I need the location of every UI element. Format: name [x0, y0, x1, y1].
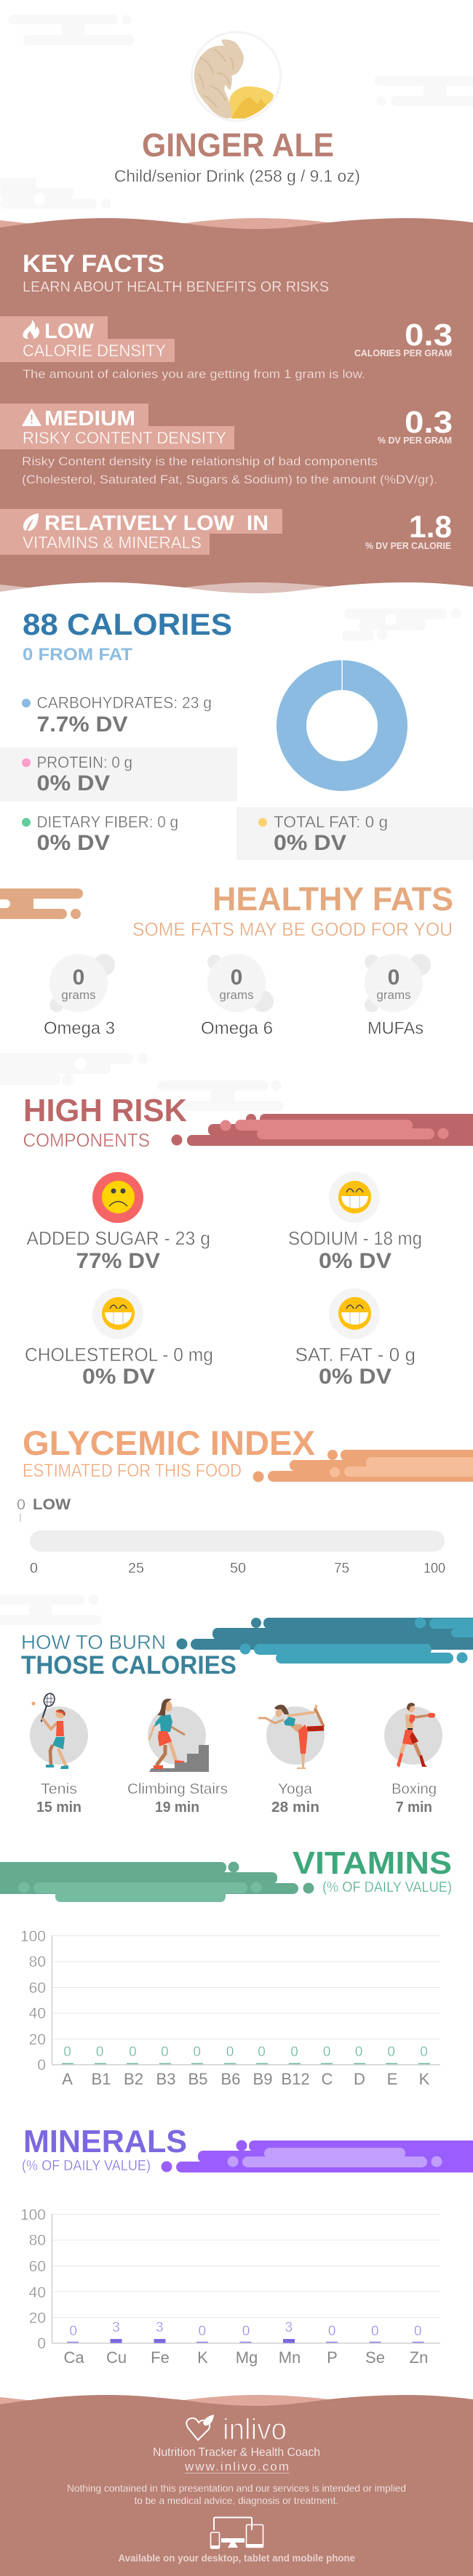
icon: tennis player — [32, 1692, 68, 1769]
fact: medium risky content density: Risky Content density is the relationship of bad components — [22, 454, 378, 468]
risk: saturated fat — [295, 1288, 416, 1389]
bar chart: vitamins — [20, 1928, 440, 2088]
icon: yoga pose — [258, 1705, 324, 1769]
panel: minerals — [20, 2124, 473, 2367]
stat: omega 3: Omega 3 — [44, 1019, 115, 1038]
bar chart: vitamins: 20 — [29, 2031, 46, 2048]
bar chart: vitamins: 0 — [96, 2045, 103, 2060]
bar chart: minerals: 0 — [69, 2324, 77, 2339]
gauge scale: 75 — [334, 1561, 349, 1576]
panel: high risk components — [23, 1093, 473, 1389]
bar chart: vitamins: 0 — [290, 2045, 298, 2060]
stat: omega 6: 0 — [231, 966, 242, 990]
minerals subheading: (% OF DAILY VALUE) — [22, 2158, 151, 2174]
risk: sodium: SODIUM - 18 mg — [288, 1227, 422, 1249]
macro: dietary fiber: 0% DV — [36, 831, 110, 855]
glycemic subheading: ESTIMATED FOR THIS FOOD — [23, 1461, 242, 1481]
gauge marker — [17, 1496, 71, 1522]
icon: leaf — [23, 513, 39, 531]
logo: inlivo: inlivo — [223, 2412, 287, 2446]
stat: mufas: 0 — [388, 966, 400, 990]
macro: carbohydrates: CARBOHYDRATES: 23 g — [36, 694, 212, 712]
glycemic heading: GLYCEMIC INDEX — [23, 1424, 315, 1462]
bar chart: vitamins: B1 — [92, 2070, 111, 2088]
bar chart: vitamins: B2 — [124, 2070, 143, 2088]
bar chart: vitamins: A — [62, 2070, 73, 2088]
decorative bars — [0, 1861, 314, 1902]
risk: added sugar: 77% DV — [76, 1249, 160, 1273]
bar chart: vitamins: 0 — [258, 2045, 266, 2060]
bar chart: vitamins: 0 — [193, 2045, 201, 2060]
bar chart: vitamins: 60 — [29, 1980, 46, 1997]
stat: mufas: MUFAs — [367, 1019, 424, 1038]
bar chart: minerals: 40 — [29, 2284, 46, 2301]
bar chart: vitamins: B9 — [253, 2070, 272, 2088]
decorative bars — [172, 1114, 473, 1146]
activity: yoga: 28 min — [271, 1799, 319, 1815]
gauge scale: 0 — [30, 1561, 38, 1576]
gauge track — [30, 1530, 445, 1552]
activity: tennis — [30, 1692, 88, 1815]
activity: boxing — [384, 1703, 442, 1815]
macro: protein: PROTEIN: 0 g — [36, 753, 132, 771]
bar chart: minerals: Ca — [63, 2348, 84, 2367]
icon: flame — [23, 320, 39, 339]
activity: boxing: Boxing — [391, 1781, 437, 1797]
activity: climbing stairs: Climbing Stairs — [127, 1781, 228, 1797]
fact: medium risky content density: (Cholesterol, Saturated Fat, Sugars & Sodium) to the amount (%DV/gr). — [22, 473, 437, 486]
bar chart: minerals: 0 — [414, 2324, 421, 2339]
bar chart: vitamins: K — [419, 2070, 430, 2088]
calories heading: 88 CALORIES — [23, 607, 232, 641]
bar chart: vitamins: 0 — [355, 2045, 362, 2060]
macro: protein: 0% DV — [36, 771, 110, 795]
wave top — [0, 218, 329, 240]
bar chart: minerals: P — [327, 2348, 338, 2367]
macro: total fat: 0% DV — [274, 831, 346, 855]
background cloud: calories — [342, 609, 461, 641]
serving subtitle: Child/senior Drink (258 g / 9.1 oz) — [114, 166, 360, 185]
panel: how to burn those calories — [21, 1617, 473, 1815]
activity: tennis: 15 min — [36, 1799, 82, 1815]
healthy fats heading: HEALTHY FATS — [212, 880, 453, 918]
fact: medium risky content density — [0, 404, 453, 486]
fact: relatively low in vitamins and minerals — [0, 509, 452, 555]
bar chart: minerals: 0 — [37, 2335, 46, 2352]
bar chart: minerals: 0 — [199, 2324, 206, 2339]
panel: calories — [0, 607, 473, 860]
logo: inlivo — [186, 2412, 287, 2446]
fact: medium risky content density: 0.3 — [405, 405, 453, 440]
stat: omega 3: 0 — [73, 966, 84, 990]
disclaimer — [67, 2482, 406, 2506]
risk: cholesterol: 0% DV — [82, 1365, 155, 1389]
tagline: Nutrition Tracker & Health Coach — [153, 2445, 320, 2459]
activity: boxing: 7 min — [396, 1799, 432, 1815]
macro: carbohydrates — [22, 694, 212, 737]
bar chart: vitamins: 40 — [29, 2005, 46, 2022]
disclaimer: Nothing contained in this presentation and our services is intended or implied — [67, 2482, 406, 2494]
bar chart: vitamins: 0 — [63, 2045, 71, 2060]
calories from fat: 0 FROM FAT — [23, 645, 132, 665]
panel: vitamins — [0, 1845, 452, 2088]
panel: footer — [0, 2395, 473, 2576]
panel: glycemic index — [17, 1424, 473, 1576]
icon: grinning face — [102, 1297, 135, 1330]
fact: low calorie density: The amount of calories you are getting from 1 gram is low. — [23, 367, 365, 381]
bar chart: vitamins: 0 — [161, 2045, 169, 2060]
decorative bars — [253, 1450, 473, 1482]
bar chart: minerals: Cu — [106, 2348, 127, 2367]
bar chart: vitamins: 0 — [323, 2045, 330, 2060]
vitamins heading: VITAMINS — [293, 1845, 452, 1881]
title: GINGER ALE — [142, 127, 334, 164]
bar chart: vitamins: 0 — [37, 2057, 46, 2074]
bar chart: vitamins: B6 — [221, 2070, 240, 2088]
bar chart: minerals: 80 — [29, 2232, 46, 2249]
gauge scale: 25 — [128, 1561, 144, 1576]
activity: climbing stairs: 19 min — [155, 1799, 199, 1815]
fact: medium risky content density: RISKY CONTENT DENSITY — [23, 428, 226, 447]
bar chart: vitamins: B12 — [281, 2070, 310, 2088]
gauge scale — [30, 1561, 445, 1576]
risk: sodium: 0% DV — [319, 1249, 391, 1273]
bar chart: minerals: 3 — [112, 2320, 120, 2335]
fact: low calorie density: 0.3 — [405, 318, 453, 353]
decorative bars — [162, 2140, 473, 2172]
macro: carbohydrates: 7.7% DV — [36, 713, 128, 737]
activity: climbing stairs — [127, 1698, 228, 1815]
bar chart: vitamins: B3 — [156, 2070, 175, 2088]
fact: medium risky content density: MEDIUM — [44, 407, 135, 430]
icon: sad face — [102, 1181, 135, 1213]
gauge marker: 0 — [17, 1497, 25, 1513]
bar chart: minerals: Mn — [279, 2348, 301, 2367]
risk: added sugar: ADDED SUGAR - 23 g — [26, 1227, 210, 1249]
icon: grinning face — [338, 1181, 371, 1213]
bar chart: minerals: Fe — [151, 2348, 170, 2367]
healthy fats subheading: SOME FATS MAY BE GOOD FOR YOU — [132, 918, 453, 940]
bar chart: vitamins: B5 — [188, 2070, 207, 2088]
fact: low calorie density: CALORIES PER GRAM — [354, 348, 452, 358]
bar chart: minerals — [20, 2207, 440, 2367]
panel: how to burn those calories: THOSE CALORIES — [21, 1651, 236, 1680]
macro: dietary fiber: DIETARY FIBER: 0 g — [36, 813, 178, 831]
activity: yoga: Yoga — [278, 1781, 313, 1797]
bar chart: minerals: 3 — [285, 2320, 293, 2335]
hero: food photo of ginger — [192, 32, 281, 121]
gauge scale: 100 — [424, 1561, 445, 1576]
activity: tennis: Tenis — [41, 1781, 77, 1797]
fact: low calorie density — [0, 316, 453, 381]
gauge marker: LOW — [33, 1496, 71, 1513]
stat: omega 6 — [201, 954, 274, 1038]
background clouds: high risk — [0, 1053, 284, 1111]
wave bottom — [0, 582, 329, 600]
bar chart: minerals: 0 — [371, 2324, 379, 2339]
gauge scale: 50 — [230, 1561, 246, 1576]
bar chart: minerals: 3 — [156, 2320, 164, 2335]
fact: low calorie density: CALORIE DENSITY — [23, 341, 166, 360]
bar chart: vitamins: 0 — [420, 2045, 428, 2060]
icon: grinning face — [338, 1297, 371, 1330]
fact: relatively low in vitamins and minerals: % DV PER CALORIE — [365, 540, 451, 551]
risk: added sugar — [26, 1172, 210, 1273]
background cloud: burn — [0, 1594, 101, 1625]
high risk heading: HIGH RISK — [23, 1093, 187, 1128]
panel: key facts — [0, 218, 473, 603]
fact: medium risky content density: % DV PER GRAM — [378, 435, 452, 446]
decorative bars — [176, 1617, 473, 1664]
bar chart: minerals: Mg — [236, 2348, 258, 2367]
macro: dietary fiber — [22, 813, 178, 855]
bar chart: minerals: 100 — [20, 2207, 46, 2223]
stat: omega 6: grams — [219, 988, 254, 1002]
bar chart: minerals: 0 — [328, 2324, 335, 2339]
bar chart: vitamins: 0 — [129, 2045, 137, 2060]
key facts heading: KEY FACTS — [23, 250, 164, 278]
activity: yoga — [258, 1705, 325, 1815]
macro: total fat: TOTAL FAT: 0 g — [274, 813, 388, 831]
fact: relatively low in vitamins and minerals: RELATIVELY LOW IN — [44, 512, 269, 535]
bar chart: minerals: 0 — [242, 2324, 250, 2339]
bar chart: vitamins: E — [387, 2070, 397, 2088]
bar chart: minerals: 20 — [29, 2310, 46, 2327]
burn heading: HOW TO BURN — [21, 1631, 166, 1653]
bar chart: vitamins: 80 — [29, 1954, 46, 1970]
macro: protein — [0, 747, 237, 801]
panel: healthy fats — [0, 880, 453, 1038]
key facts subheading: LEARN ABOUT HEALTH BENEFITS OR RISKS — [23, 279, 329, 295]
bar chart: minerals: 60 — [29, 2258, 46, 2275]
decorative bars — [0, 888, 83, 919]
vitamins subheading: (% OF DAILY VALUE) — [322, 1879, 452, 1895]
availability note: Available on your desktop, tablet and mobile phone — [118, 2552, 355, 2564]
website link: www.inlivo.com — [184, 2460, 289, 2473]
fact: low calorie density: LOW — [44, 320, 95, 343]
bar chart: vitamins: D — [354, 2070, 365, 2088]
risk: cholesterol — [25, 1288, 213, 1389]
macro: total fat — [236, 807, 473, 860]
fact: relatively low in vitamins and minerals: 1.8 — [409, 510, 452, 545]
risk: sodium — [288, 1172, 422, 1273]
icon: devices — [210, 2517, 263, 2548]
bar chart: minerals: Zn — [410, 2348, 428, 2367]
donut chart — [291, 659, 393, 777]
stat: omega 3: grams — [61, 988, 96, 1002]
stat: mufas: grams — [376, 988, 411, 1002]
stat: omega 3 — [44, 954, 115, 1038]
risk: cholesterol: CHOLESTEROL - 0 mg — [25, 1344, 213, 1365]
stat: omega 6: Omega 6 — [201, 1019, 273, 1038]
disclaimer: to be a medical advice, diagnosis or treatment. — [134, 2495, 338, 2506]
risk: saturated fat: 0% DV — [319, 1365, 391, 1389]
risk: saturated fat: SAT. FAT - 0 g — [295, 1344, 416, 1365]
bar chart: minerals: K — [197, 2348, 208, 2367]
bar chart: vitamins: C — [322, 2070, 333, 2088]
icon: stair climber — [149, 1698, 209, 1772]
bar chart: vitamins: 0 — [226, 2045, 234, 2060]
minerals heading: MINERALS — [23, 2124, 187, 2159]
bar chart: vitamins: 100 — [20, 1928, 46, 1945]
bar chart: vitamins: 0 — [387, 2045, 395, 2060]
fact: relatively low in vitamins and minerals: VITAMINS & MINERALS — [23, 533, 202, 552]
high risk subheading: COMPONENTS — [23, 1129, 150, 1151]
stat: mufas — [365, 954, 431, 1038]
icon: boxer — [397, 1703, 435, 1768]
bar chart: minerals: Se — [365, 2348, 385, 2367]
icon: warning triangle — [22, 409, 41, 426]
background clouds: header — [0, 15, 473, 209]
